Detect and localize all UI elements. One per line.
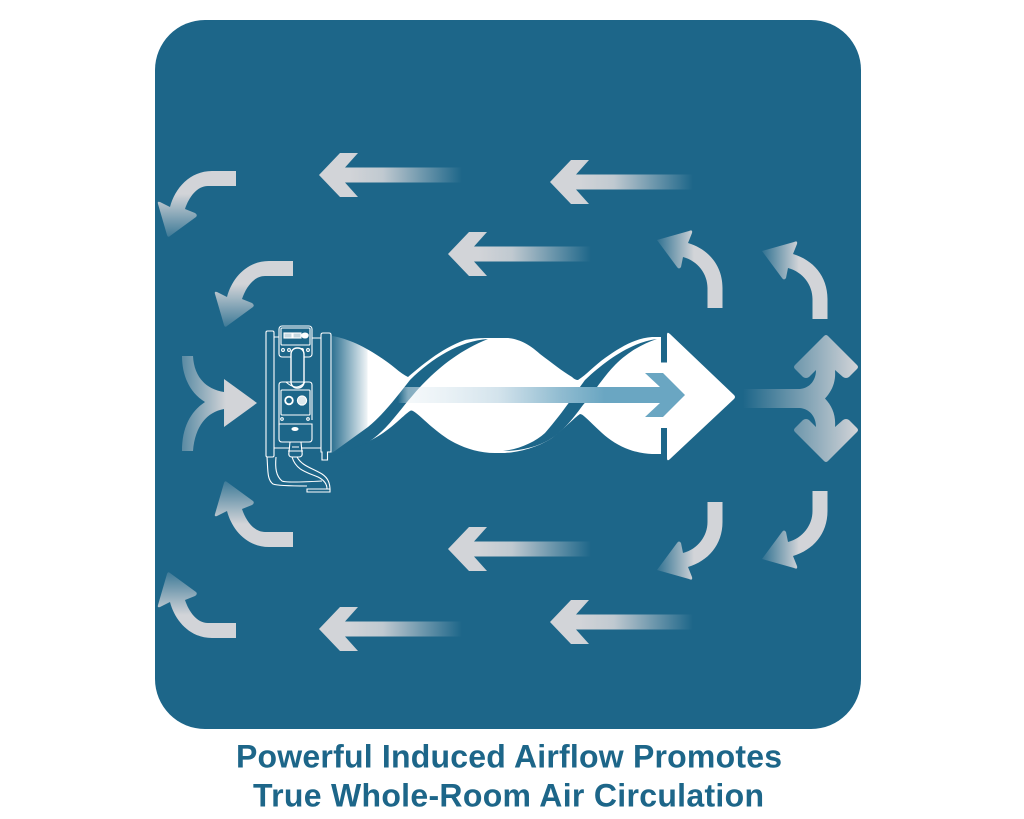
panel: airflow background	[155, 20, 861, 729]
connector	[289, 442, 302, 457]
right rail	[321, 333, 331, 460]
arrow: split at far wall	[743, 335, 858, 462]
arrow: return flow bottom 3	[319, 607, 462, 651]
arrow: curved bottom-left inner	[215, 481, 293, 547]
arrow: intake merge into device	[182, 356, 257, 451]
ribbon 2	[503, 339, 657, 451]
dial	[285, 397, 293, 404]
arrow: return flow top 1	[319, 153, 462, 197]
icon: air mover device	[266, 326, 331, 492]
left rail	[266, 331, 274, 457]
arrow: return flow bottom 1	[448, 527, 591, 571]
title line 2: True Whole-Room Air Circulation	[253, 778, 764, 814]
jet silhouette	[332, 336, 667, 454]
title	[236, 738, 782, 814]
title line 1: Powerful Induced Airflow Promotes	[236, 738, 782, 774]
arrow: curved top-right inner	[657, 230, 722, 308]
arrow: curved top-right outer	[762, 241, 828, 319]
handle column	[291, 348, 304, 388]
lower housing	[279, 424, 312, 442]
arrow: curved bottom-right outer	[762, 491, 828, 569]
arrow: curved bottom-left outer	[158, 572, 236, 638]
top outlet box	[279, 326, 312, 357]
arrow: curved top-left outer	[158, 171, 236, 237]
arrow: return flow top 2	[550, 160, 693, 204]
control box	[279, 382, 312, 420]
jet arrowhead	[667, 333, 735, 460]
dial filled	[297, 396, 307, 405]
arrow: return flow top 3	[448, 232, 591, 276]
ribbon 1	[332, 339, 488, 456]
power cable	[267, 457, 322, 486]
arrow: curved bottom-right inner	[657, 502, 722, 580]
arrow: inner flow direction	[398, 373, 685, 417]
airflow: twisting jet with arrowhead	[332, 333, 735, 460]
arrow: curved top-left inner	[215, 261, 293, 327]
arrow: return flow bottom 2	[550, 600, 693, 644]
